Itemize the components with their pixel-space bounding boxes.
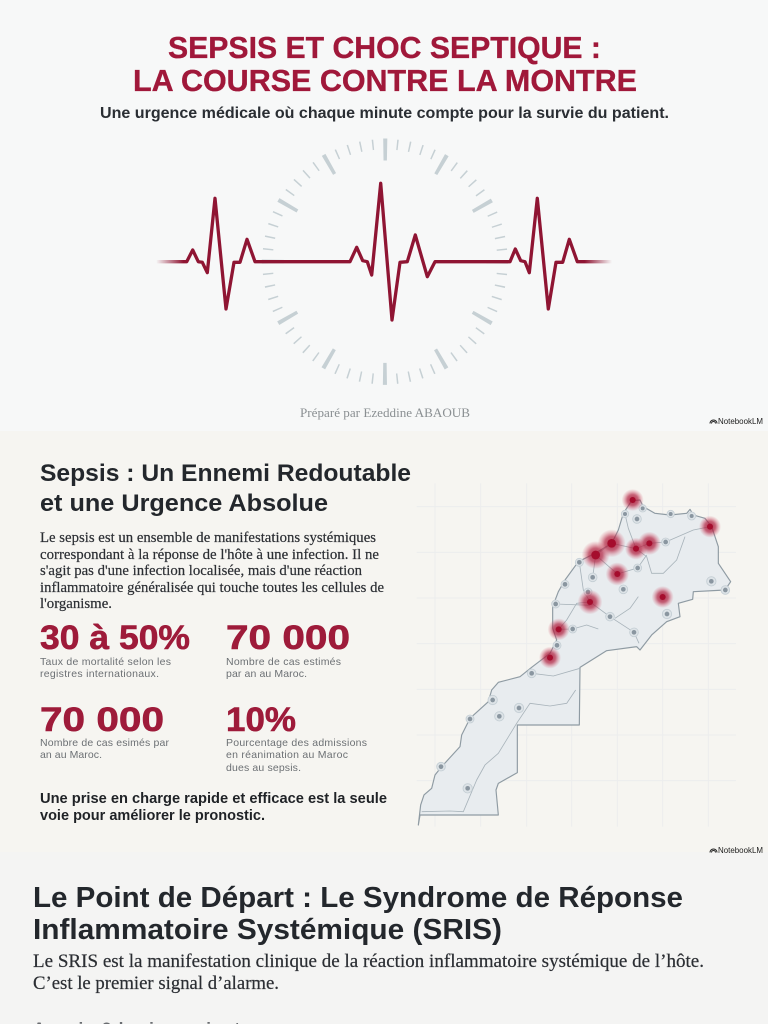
- text block: sepsis definition: Le sepsis est un ensemble de manifestations systémiques: [40, 530, 376, 546]
- stat: mortality: [40, 619, 190, 680]
- callout: prompt care: voie pour améliorer le pronostic.: [40, 808, 265, 824]
- stat: mortality: Taux de mortalité selon les: [40, 656, 171, 668]
- stat: estimated cases: [226, 619, 350, 680]
- title: [133, 30, 637, 98]
- text block: SRIS definition: [33, 952, 704, 994]
- logo: NotebookLM middle: NotebookLM: [718, 845, 763, 855]
- heading: SRIS: Le Point de Départ : Le Syndrome de Réponse: [33, 882, 683, 914]
- heading: sepsis: et une Urgence Absolue: [40, 490, 328, 517]
- heading: SRIS: Inflammatoire Systémique (SRIS): [33, 914, 502, 946]
- stat: estimated cases repeat: Nombre de cas esimés par: [40, 737, 170, 749]
- text block: sepsis definition: inflammatoire généralisée qui touche toutes les cellules de: [40, 580, 384, 596]
- text block: SRIS definition: Le SRIS est la manifestation clinique de la réaction inflammatoire systémique de l’hôte.: [33, 952, 704, 972]
- stat: ICU admissions: 10%: [226, 701, 296, 739]
- title: LA COURSE CONTRE LA MONTRE: [133, 63, 637, 98]
- stat: estimated cases: par an au Maroc.: [226, 668, 307, 680]
- text block: SRIS definition: C’est le premier signal d’alarme.: [33, 974, 279, 994]
- text block: sepsis definition: correspondant à la réponse de l'hôte à une infection. Il ne: [40, 547, 379, 563]
- icon: clock face: [268, 144, 502, 379]
- callout: prompt care: [40, 791, 387, 824]
- text block: sepsis definition: s'agit pas d'une infection localisée, mais d'une réaction: [40, 563, 362, 579]
- map markers: low burden: [437, 505, 730, 793]
- stat: mortality: 30 à 50%: [40, 619, 190, 657]
- stat: ICU admissions: [226, 701, 367, 774]
- logo: NotebookLM top: NotebookLM: [718, 416, 763, 426]
- text block: sepsis definition: l'organisme.: [40, 596, 112, 612]
- stat: ICU admissions: en réanimation au Maroc: [226, 749, 348, 761]
- chart: heartbeat ECG line: [157, 183, 612, 320]
- map: Morocco sepsis hotspots: [417, 483, 736, 827]
- stat: estimated cases repeat: 70 000: [40, 701, 164, 739]
- stat: ICU admissions: Pourcentage des admissions: [226, 737, 367, 749]
- stat: estimated cases: 70 000: [226, 619, 350, 657]
- stat: estimated cases repeat: [40, 701, 170, 761]
- heading: sepsis: [40, 460, 411, 517]
- stat: estimated cases: Nombre de cas estimés: [226, 656, 341, 668]
- stat: estimated cases repeat: an au Maroc.: [40, 749, 102, 761]
- stat: mortality: registres internationaux.: [40, 668, 159, 680]
- heading: sepsis: Sepsis : Un Ennemi Redoutable: [40, 460, 411, 487]
- author credit: Préparé par Ezeddine ABAOUB: [300, 405, 470, 420]
- heading: SRIS: [33, 882, 683, 946]
- callout: prompt care: Une prise en charge rapide et efficace est la seule: [40, 791, 387, 807]
- text block: sepsis definition: [40, 530, 384, 612]
- map markers: hotspots: [539, 489, 721, 669]
- stat: ICU admissions: dues au sepsis.: [226, 762, 301, 774]
- title: SEPSIS ET CHOC SEPTIQUE :: [168, 30, 601, 65]
- subtitle: Une urgence médicale où chaque minute compte pour la survie du patient.: [100, 105, 669, 122]
